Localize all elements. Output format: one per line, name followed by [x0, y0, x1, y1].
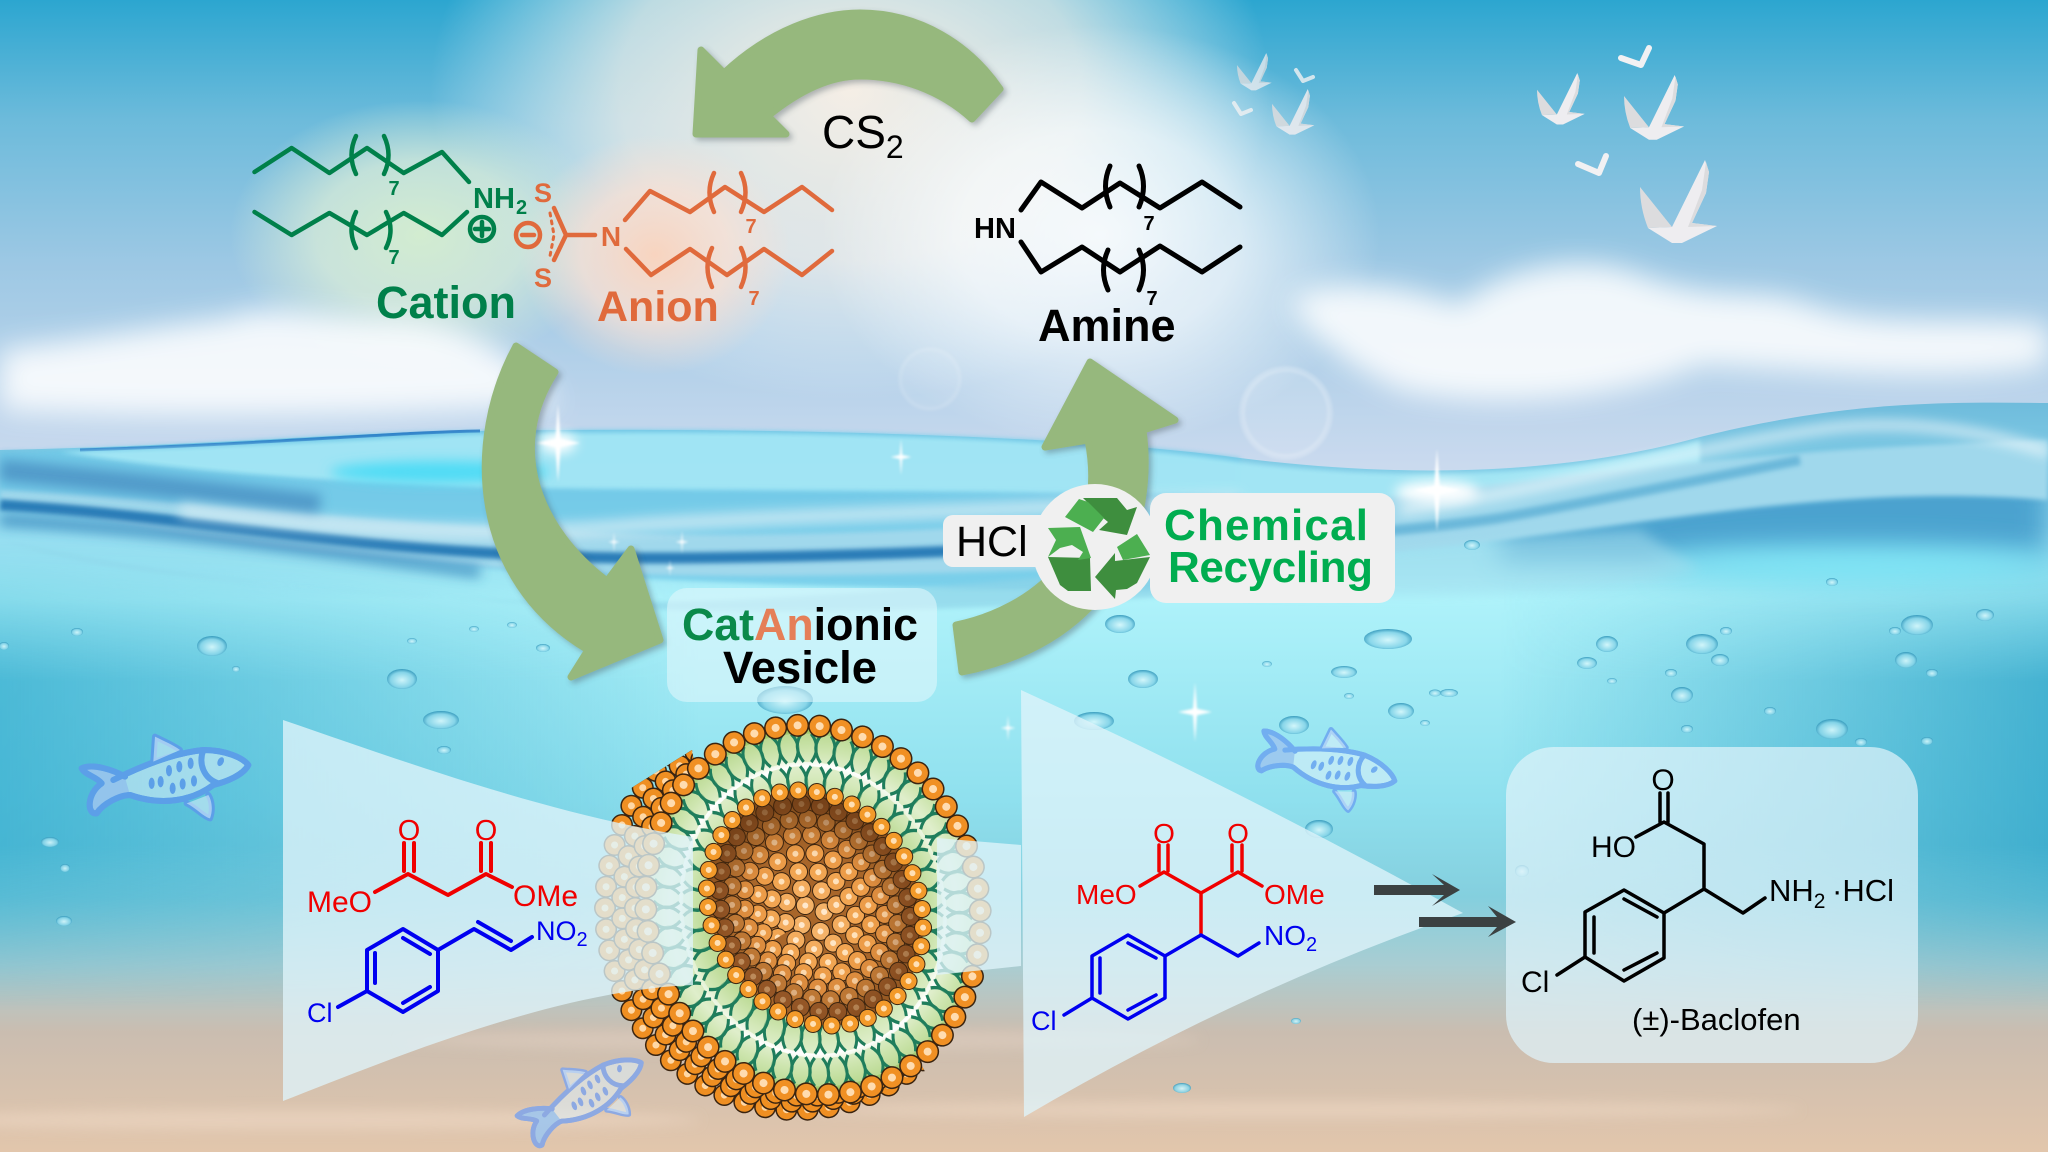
icon: faded bird [1272, 89, 1314, 135]
icon: medium bird [1624, 75, 1684, 140]
amine molecule: HN [974, 213, 1016, 245]
product: Michael adduct blue part: 2 [1306, 934, 1317, 956]
baclofen structure: ·HCl [1832, 873, 1894, 908]
cation molecule: NH [473, 183, 515, 215]
product: Michael adduct red part: OMe [1264, 879, 1325, 910]
label: (±)-Baclofen: (±)-Baclofen [1632, 1002, 1801, 1037]
heading: CatAnionic Vesicle: Vesicle [723, 642, 877, 693]
anion molecule: S [534, 178, 552, 208]
substrate: 4-chloro-nitrostyrene: NO [536, 916, 576, 946]
anion molecule: 7 [745, 216, 757, 238]
vesicle [591, 672, 1035, 1148]
chemical recycling badge [943, 484, 1395, 610]
icon: recycling arrows [1048, 498, 1150, 599]
inner rim heads [665, 751, 965, 1065]
substrate: 4-chloro-nitrostyrene [307, 916, 588, 1028]
icon: distant bird ticks [1234, 48, 1649, 173]
label: CS2: CS [822, 106, 886, 158]
panel: funnel right strip [937, 838, 1021, 975]
cation molecule: 7 [388, 247, 400, 269]
funnel panels [283, 690, 1918, 1117]
baclofen structure [1521, 764, 1894, 1037]
recycling label box [1150, 493, 1395, 603]
product: Michael adduct red part: O [1227, 818, 1249, 849]
substrate: dimethyl malonate: OMe [513, 880, 578, 913]
substrate: dimethyl malonate: MeO [307, 886, 372, 919]
substrate: dimethyl malonate: O [475, 815, 497, 847]
bubbles [0, 540, 1994, 1093]
product: Michael adduct red part [1076, 818, 1325, 935]
amine molecule [974, 166, 1240, 351]
outer lipid heads [605, 687, 1021, 1133]
baclofen structure: Cl [1521, 966, 1549, 999]
back row lipid heads [594, 750, 925, 1121]
icon: medium bird 2 [1537, 73, 1585, 124]
bowl shading [665, 751, 965, 1065]
fish [82, 706, 1404, 1152]
heading: CatAnionic Vesicle [667, 588, 937, 702]
vesicle interior lumen [665, 751, 965, 1065]
arrow: reaction step one [1374, 874, 1460, 906]
substrate: dimethyl malonate [307, 815, 578, 919]
HCl tag: HCl [956, 518, 1028, 566]
recycling label box: Recycling [1168, 543, 1373, 592]
amine molecule: 7 [1146, 288, 1158, 310]
arrow: to baclofen [1419, 906, 1516, 937]
cation molecule [254, 136, 527, 328]
icon: faded small bird [1237, 53, 1272, 90]
icon: right fish [1248, 706, 1404, 822]
recycling label box: Chemical [1164, 501, 1368, 550]
heading: CatAnionic Vesicle: CatAnionic [682, 599, 918, 650]
bilayer disc [605, 687, 1021, 1133]
product: Michael adduct red part: O [1153, 818, 1175, 849]
product: Michael adduct blue part: Cl [1031, 1006, 1056, 1036]
baclofen structure: 2 [1814, 890, 1825, 913]
baclofen structure: HO [1591, 831, 1636, 864]
arrow: CS2 addition [696, 13, 1000, 134]
amine molecule: 7 [1143, 213, 1155, 235]
baclofen structure: O [1651, 764, 1675, 797]
anion molecule: S [534, 263, 552, 293]
arrow: recycling to amine [956, 362, 1175, 672]
anion molecule [516, 173, 832, 331]
substrate: 4-chloro-nitrostyrene: Cl [307, 998, 332, 1028]
inner sphere rows [682, 769, 948, 1047]
panel: product chevron [1021, 690, 1463, 1117]
substrate: dimethyl malonate: O [398, 815, 420, 847]
cycle arrows [485, 13, 1175, 677]
HCl tag [943, 515, 1053, 567]
label: Amine: Amine [1038, 300, 1176, 351]
substrate: 4-chloro-nitrostyrene: 2 [576, 929, 588, 951]
lens flares and sparkles [536, 349, 1479, 742]
panel: substrates funnel [283, 720, 693, 1101]
product: Michael adduct blue part: NO [1264, 920, 1306, 951]
label: Anion: Anion [597, 283, 719, 331]
anion molecule: N [601, 221, 621, 252]
icon: left fish [82, 737, 248, 818]
lipid tails [591, 672, 1035, 1148]
icon: bottom fish [508, 1041, 657, 1152]
label: CS2: 2 [886, 129, 904, 165]
panel: baclofen box [1506, 747, 1918, 1063]
product: Michael adduct blue part [1031, 920, 1317, 1036]
product: Michael adduct red part: MeO [1076, 879, 1137, 910]
arrow: salt to vesicle [485, 346, 660, 677]
cation molecule: 2 [516, 197, 527, 219]
label: Cation: Cation [376, 277, 516, 328]
anion molecule: 7 [748, 288, 760, 310]
icon: large bird [1640, 160, 1717, 243]
baclofen structure: NH [1769, 873, 1814, 908]
cation molecule: 7 [388, 178, 400, 200]
birds [1234, 48, 1717, 243]
